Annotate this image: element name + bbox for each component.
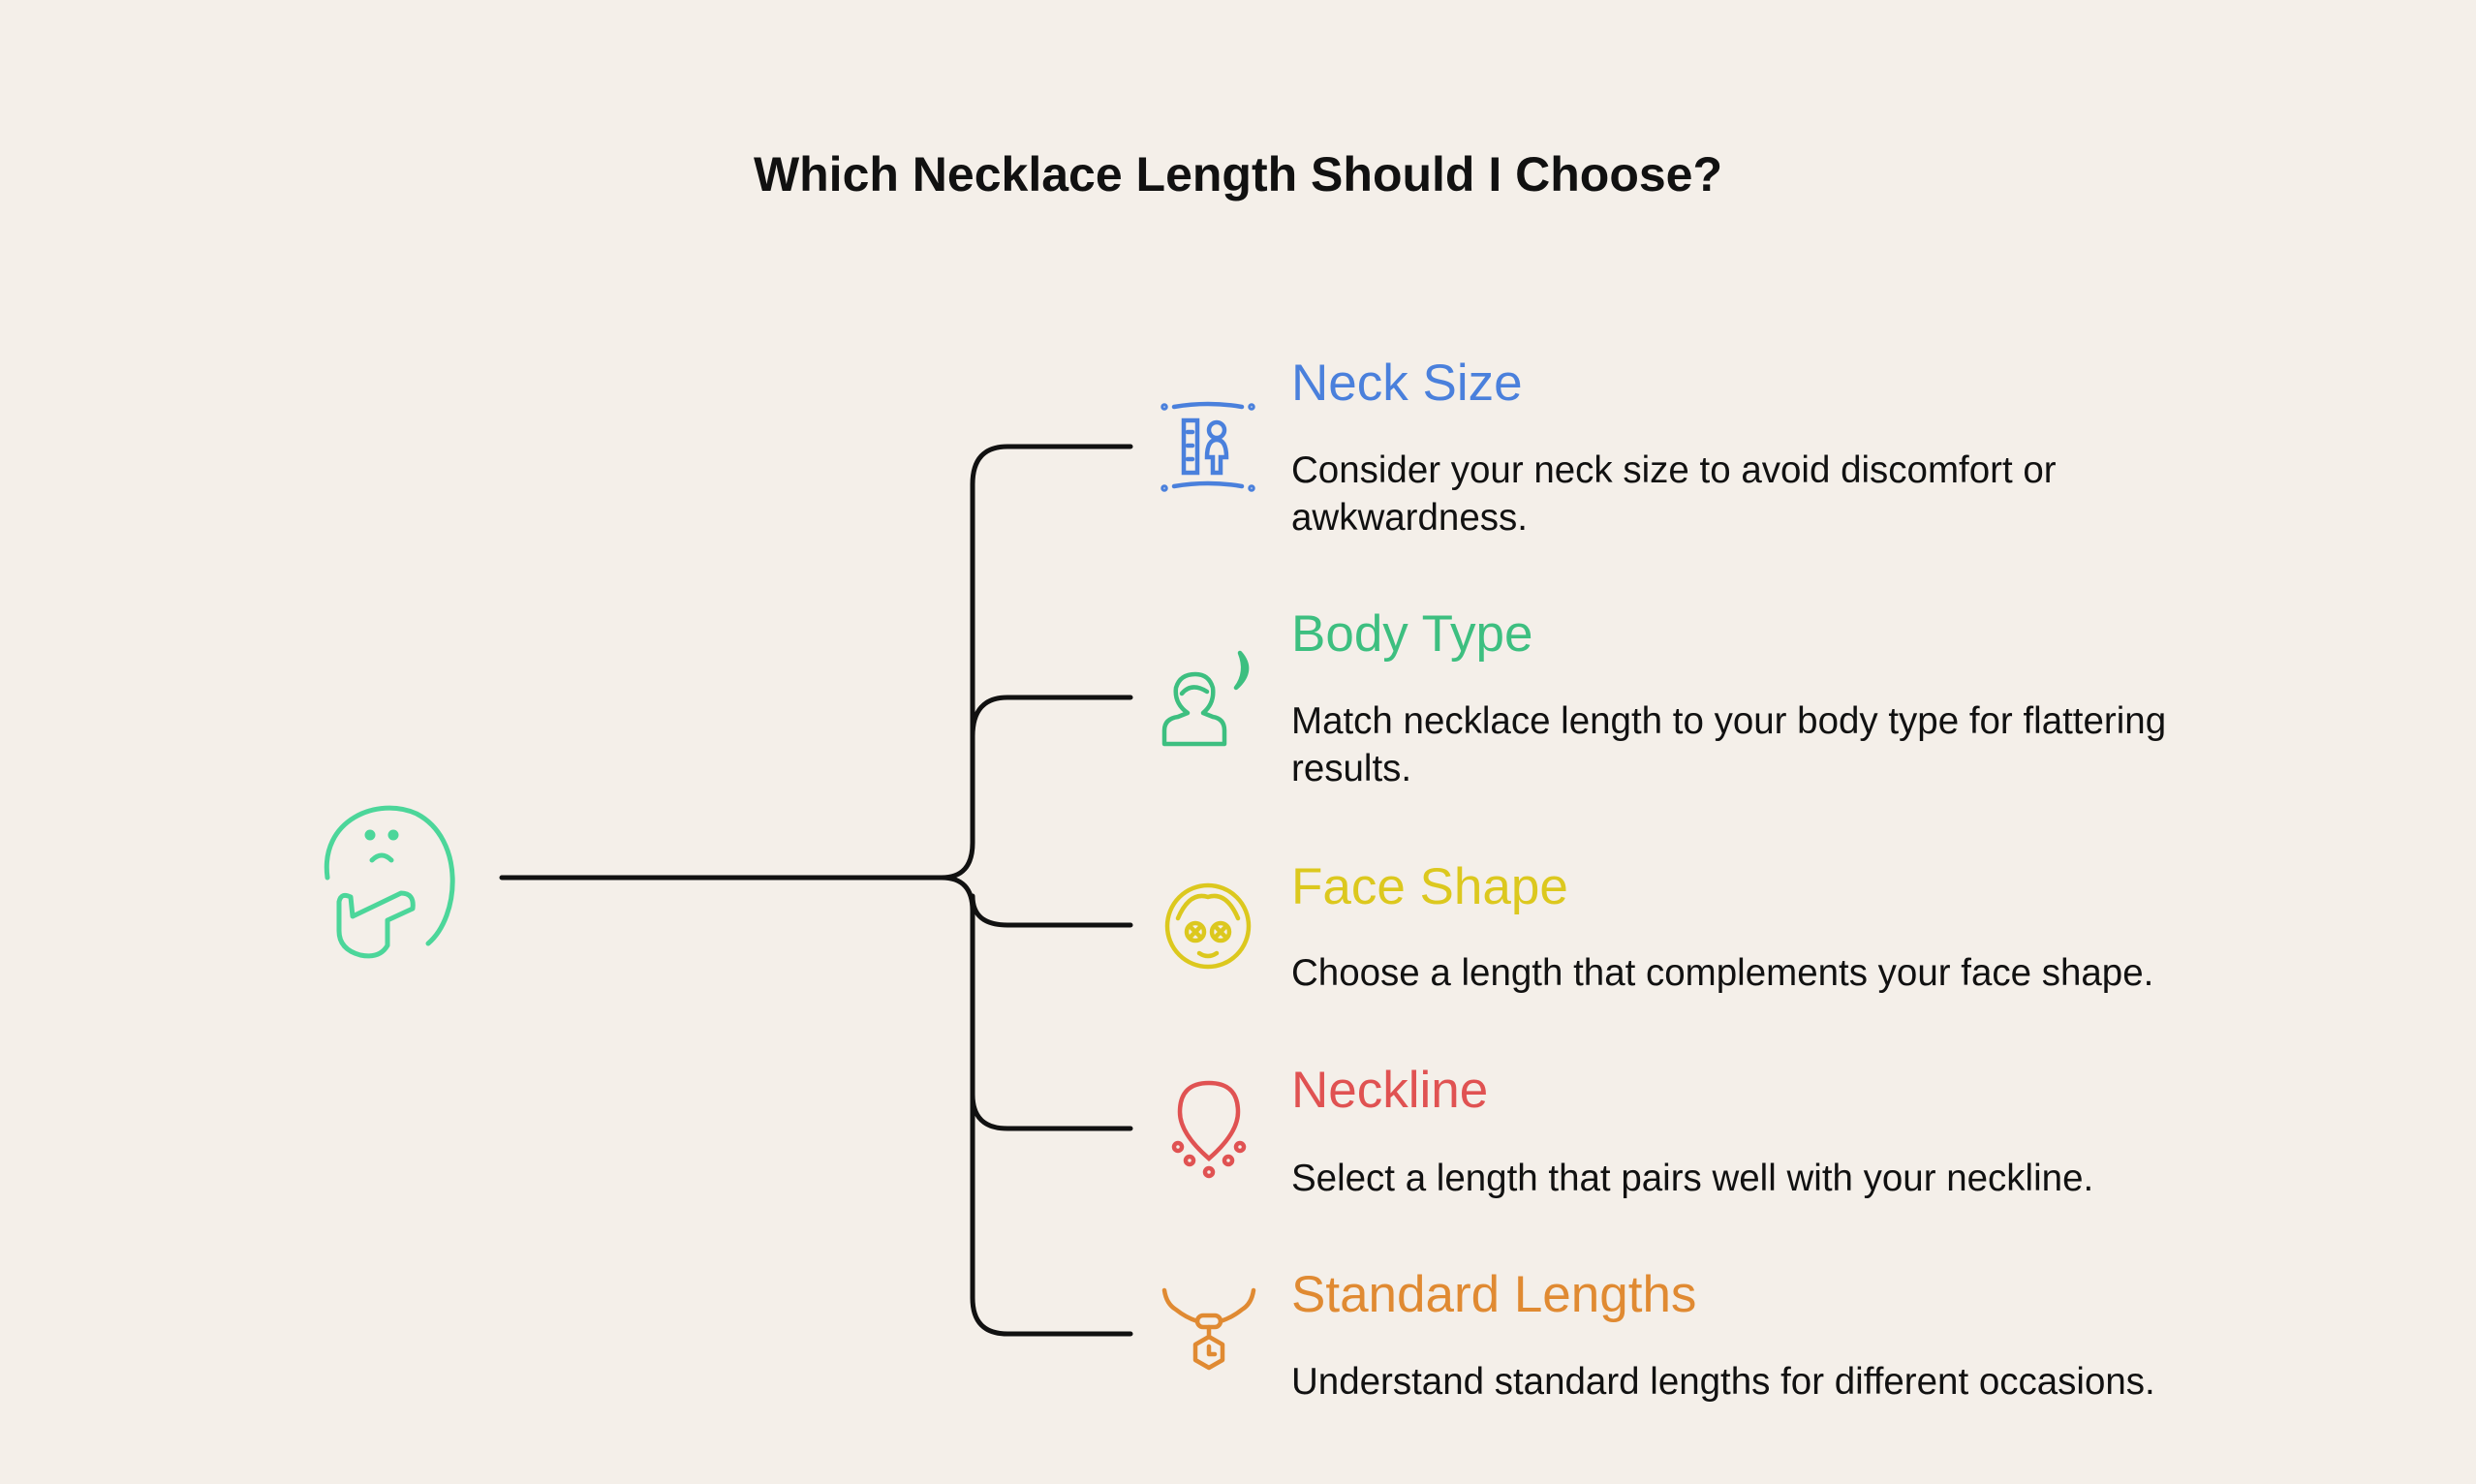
text: body type: Match necklace length to your body type for flattering <box>1291 700 2166 742</box>
text: body type: results. <box>1291 748 1411 789</box>
heading: body type: Body Type <box>1291 605 1532 663</box>
icon: standard lengths <box>1162 1288 1255 1370</box>
heading: face shape: Face Shape <box>1291 858 1568 915</box>
heading: neckline: Neckline <box>1291 1062 1488 1119</box>
heading: standard lengths: Standard Lengths <box>1291 1266 1696 1323</box>
text: neck size: Consider your neck size to avoid discomfort or <box>1291 449 2057 491</box>
icon: neck size <box>1161 401 1255 492</box>
icon: thinking face <box>324 806 455 959</box>
text: face shape: Choose a length that complements your face shape. <box>1291 952 2153 994</box>
title: Which Necklace Length Should I Choose? <box>754 147 1722 201</box>
text: standard lengths: Understand standard lengths for different occasions. <box>1291 1361 2155 1403</box>
icon: neckline <box>1172 1081 1246 1178</box>
text: neckline: Select a length that pairs well with your neckline. <box>1291 1158 2093 1199</box>
icon: face shape <box>1164 883 1252 969</box>
text: neck size: awkwardness. <box>1291 497 1528 539</box>
heading: neck size: Neck Size <box>1291 355 1523 412</box>
text: neck size <box>1291 449 2057 539</box>
text: body type <box>1291 700 2166 789</box>
icon: body type <box>1162 651 1250 746</box>
